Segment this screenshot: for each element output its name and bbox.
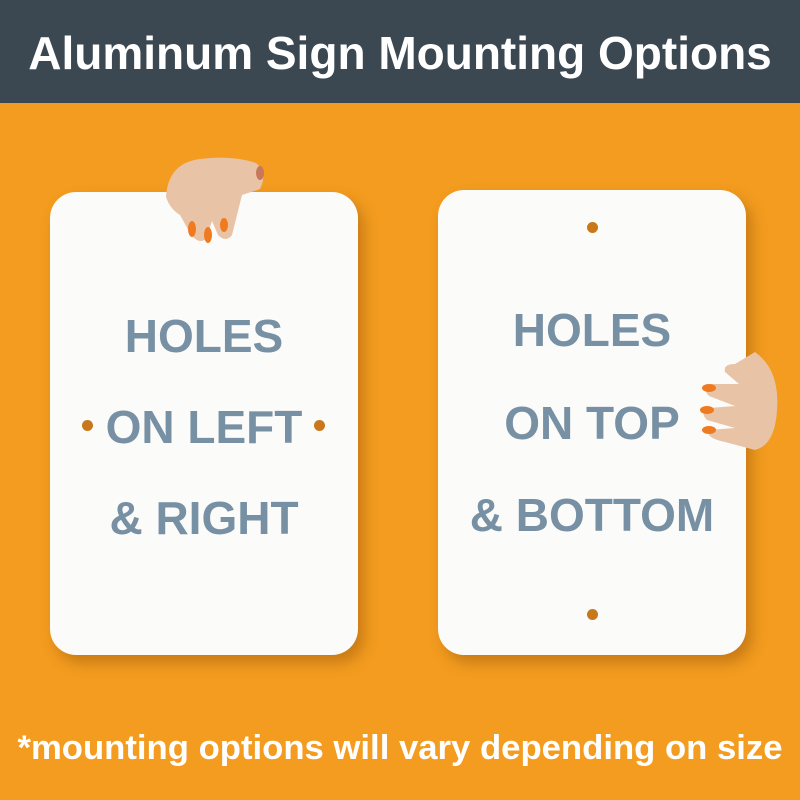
hole right xyxy=(314,420,325,431)
sign text right: HOLES xyxy=(513,304,671,356)
hole top xyxy=(587,222,598,233)
panel: left sign: ON LEFT xyxy=(106,401,302,453)
panel: left sign xyxy=(50,192,358,655)
header bar xyxy=(0,0,800,103)
panel: right sign: & BOTTOM xyxy=(470,489,714,541)
icon: hand right xyxy=(700,352,778,450)
hole left xyxy=(82,420,93,431)
panel: left sign: & RIGHT xyxy=(109,492,299,544)
hole bottom xyxy=(587,609,598,620)
title: Aluminum Sign Mounting Options xyxy=(28,27,772,79)
panel: right sign xyxy=(438,190,746,655)
panel: right sign: ON TOP xyxy=(504,397,680,449)
icon: hand top xyxy=(166,158,264,243)
footer note: *mounting options will vary depending on size xyxy=(17,729,783,767)
sign text left: HOLES xyxy=(125,310,283,362)
